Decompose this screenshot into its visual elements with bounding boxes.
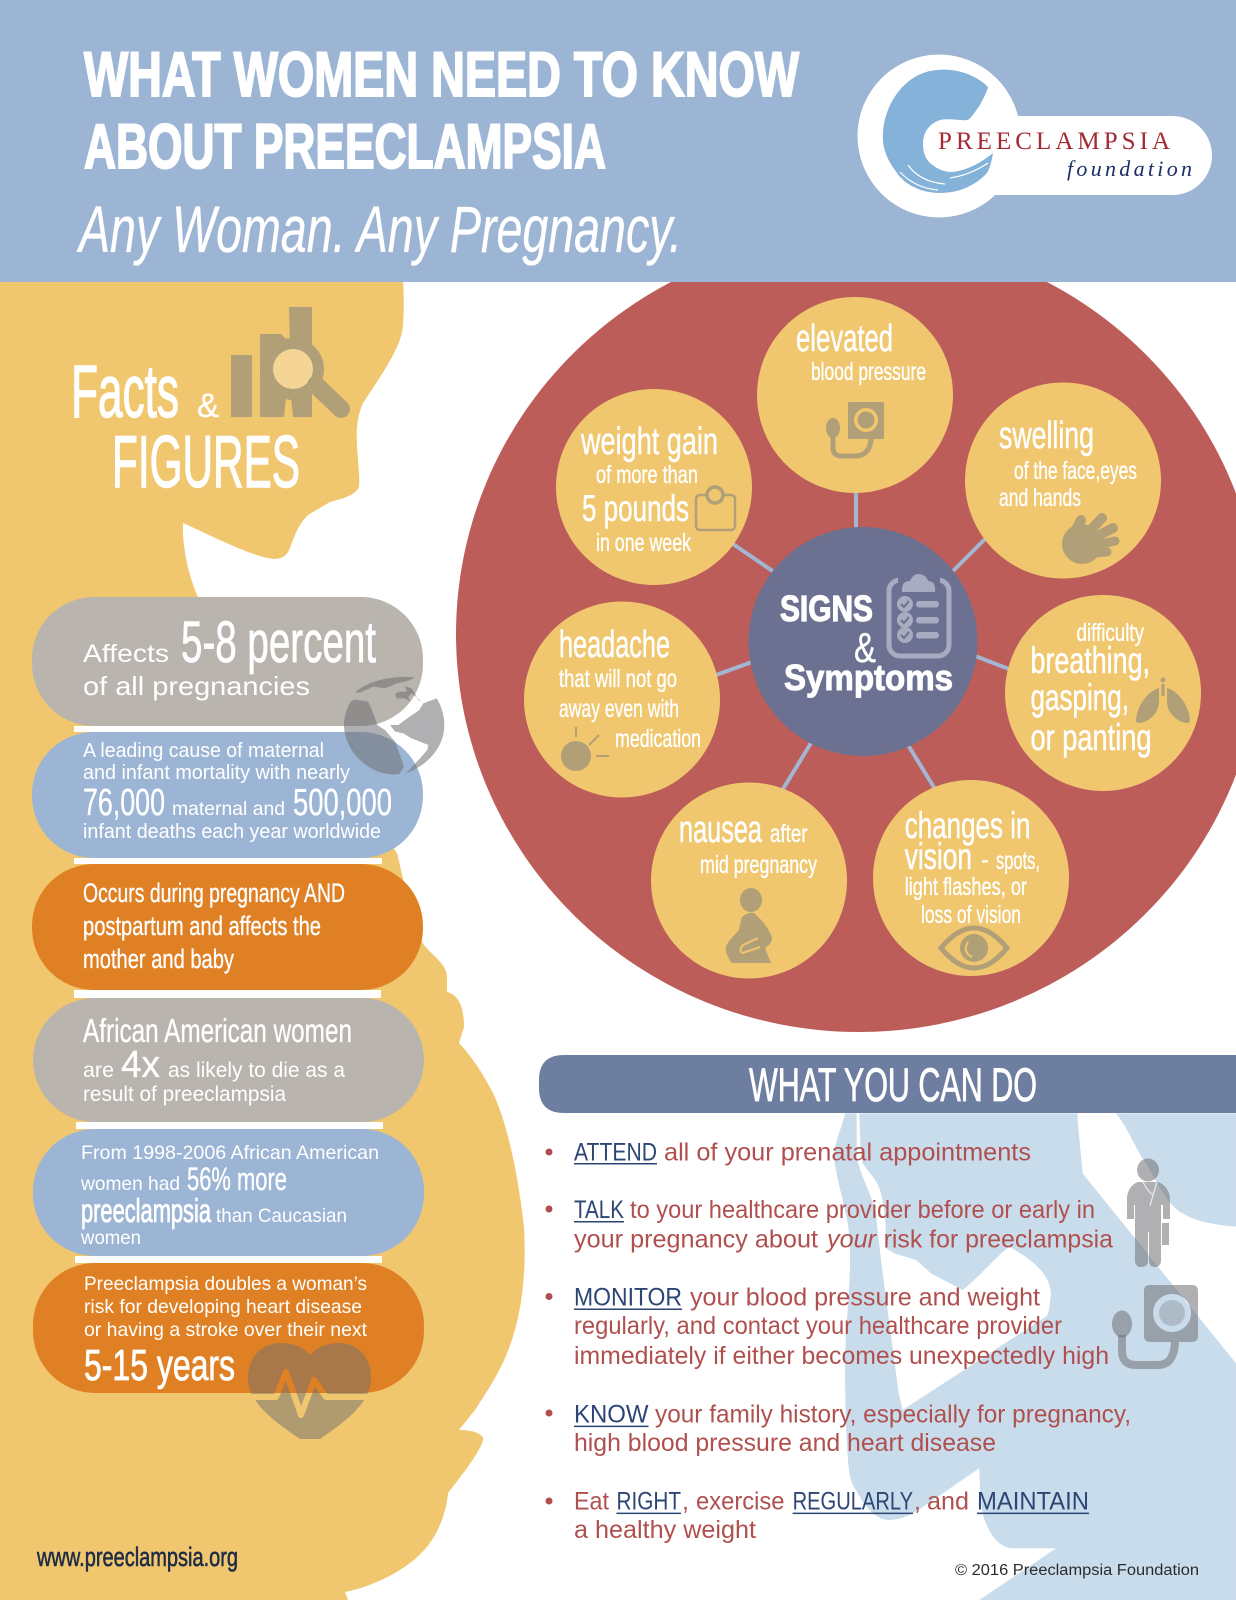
panel: affects 5-8 percent: 5-8 percent <box>181 610 376 675</box>
icon: bar chart with magnifier <box>231 307 341 417</box>
item: monitor blood pressure: MONITOR <box>574 1284 682 1312</box>
logo: Preeclampsia Foundation <box>858 54 1212 218</box>
item: eat right, exercise, maintain weight: exercise <box>696 1488 784 1516</box>
header band <box>0 0 1236 282</box>
panel: during pregnancy and postpartum: mother and baby <box>83 944 234 974</box>
item: know family history: high blood pressure and heart disease <box>574 1429 996 1457</box>
subtitle: Any Woman. Any Pregnancy. <box>76 192 682 266</box>
panel: leading cause of mortality: 76,000 <box>83 782 165 824</box>
logo: Preeclampsia Foundation: PREECLAMPSIA <box>938 128 1170 155</box>
symptom: swelling: and hands <box>999 484 1081 512</box>
copyright: © 2016 Preeclampsia Foundation <box>955 1562 1199 1579</box>
symptom: changes in vision: - <box>981 843 989 876</box>
website url: www.preeclampsia.org <box>36 1542 238 1572</box>
symptom: weight gain: weight gain <box>580 421 718 463</box>
panel: African American women 4x: result of preeclampsia <box>83 1083 286 1106</box>
panel: 56% more preeclampsia: women had <box>80 1173 180 1195</box>
panel: leading cause of mortality <box>32 732 423 858</box>
symptom: nausea <box>651 782 847 978</box>
panel: African American women 4x: are <box>83 1059 114 1082</box>
panel: African American women 4x: African American women <box>83 1012 352 1049</box>
heading: Facts and Figures: & <box>197 387 219 425</box>
symptom: nausea: mid pregnancy <box>700 851 817 879</box>
icon: doctor <box>1127 1158 1170 1267</box>
heading: Facts and Figures <box>71 350 300 503</box>
symptom: headache: headache <box>559 624 670 666</box>
item: eat right, exercise, maintain weight: and <box>927 1488 969 1516</box>
heading bar: what you can do: WHAT YOU CAN DO <box>749 1058 1037 1111</box>
yellow silhouette: pregnant woman <box>0 282 525 1600</box>
symptom: changes in vision <box>873 780 1069 976</box>
panel: during pregnancy and postpartum <box>32 864 423 990</box>
big red signs and symptoms circle <box>456 236 1236 1032</box>
title: ABOUT PREECLAMPSIA <box>84 112 606 182</box>
central hub: signs and symptoms: & <box>854 624 876 671</box>
symptom: headache: that will not go <box>559 665 677 693</box>
symptom: weight gain: of more than <box>596 461 698 489</box>
item: eat right, exercise, maintain weight: , <box>914 1488 921 1516</box>
title <box>84 40 799 182</box>
central hub: signs and symptoms: Symptoms <box>784 657 953 698</box>
panel: leading cause of mortality: A leading cause of maternal <box>83 740 324 762</box>
item: talk to your provider: your pregnancy about <box>574 1226 818 1254</box>
white connector strips between pills <box>74 726 383 1263</box>
light blue silhouette: mother and child <box>834 1113 1236 1600</box>
item: know family history <box>546 1401 1131 1457</box>
symptom: elevated blood pressure: blood pressure <box>811 358 926 386</box>
symptom: difficulty breathing: gasping, <box>1030 677 1129 718</box>
panel: heart disease risk: or having a stroke over their next <box>84 1319 368 1341</box>
symptom: elevated blood pressure <box>757 297 953 493</box>
item: know family history: your family history, especially for pregnancy, <box>655 1401 1131 1429</box>
action list: what you can do <box>546 1138 1131 1544</box>
panel: heart disease risk: 5-15 years <box>84 1341 235 1390</box>
symptom: difficulty breathing: breathing, <box>1030 640 1150 681</box>
title: WHAT WOMEN NEED TO KNOW <box>84 40 799 110</box>
panel: 56% more preeclampsia: From 1998-2006 African American <box>81 1142 379 1164</box>
panel: 56% more preeclampsia <box>33 1129 424 1256</box>
item: talk to your provider <box>546 1196 1113 1254</box>
icon: scale <box>696 487 735 530</box>
panel: heart disease risk: risk for developing heart disease <box>84 1296 362 1318</box>
symptom: swelling <box>965 382 1161 578</box>
panel: leading cause of mortality: 500,000 <box>293 782 392 824</box>
panel: African American women 4x <box>33 998 424 1122</box>
panel: African American women 4x: as likely to die as a <box>168 1059 345 1082</box>
panel: leading cause of mortality: and infant mortality with nearly <box>83 762 350 784</box>
item: talk to your provider: risk for preeclampsia <box>884 1226 1113 1254</box>
item: attend appointments: ATTEND <box>574 1138 657 1166</box>
icon: blood pressure monitor <box>1112 1285 1198 1365</box>
icon: clipboard checklist <box>889 574 949 656</box>
symptom: elevated blood pressure: elevated <box>796 318 893 360</box>
panel: leading cause of mortality: maternal and <box>172 799 285 820</box>
symptom: changes in vision: changes in <box>905 805 1030 846</box>
item: eat right, exercise, maintain weight: a healthy weight <box>574 1516 756 1544</box>
symptom: difficulty breathing: or panting <box>1030 717 1152 758</box>
item: monitor blood pressure: regularly, and contact your healthcare provider <box>574 1312 1062 1340</box>
symptom: difficulty breathing: difficulty <box>1076 619 1144 647</box>
panel: affects 5-8 percent: Affects <box>83 640 169 668</box>
symptom: weight gain: 5 pounds <box>582 488 689 529</box>
symptom: weight gain: in one week <box>596 529 691 557</box>
central hub: signs and symptoms: SIGNS <box>780 588 873 629</box>
symptom: headache: away even with <box>559 695 679 723</box>
icon: lungs <box>1136 678 1190 723</box>
item: eat right, exercise, maintain weight: RIGHT <box>616 1488 681 1516</box>
item: eat right, exercise, maintain weight: MAINTAIN <box>977 1488 1089 1516</box>
panel: heart disease risk <box>33 1263 424 1393</box>
item: monitor blood pressure <box>546 1284 1109 1370</box>
item: eat right, exercise, maintain weight: REGULARLY <box>793 1488 913 1516</box>
item: eat right, exercise, maintain weight: , <box>682 1488 689 1516</box>
panel: affects 5-8 percent: of all pregnancies <box>83 671 310 701</box>
heading bar: what you can do <box>539 1055 1236 1113</box>
icon: hand <box>1062 518 1115 564</box>
symptom: changes in vision: light flashes, or <box>905 873 1027 901</box>
icon: heart with pulse line <box>248 1343 371 1439</box>
item: eat right, exercise, maintain weight <box>546 1488 1089 1544</box>
icon: head pain burst <box>561 727 609 771</box>
icon: pregnant woman <box>726 888 772 963</box>
heading: Facts and Figures: FIGURES <box>112 422 300 503</box>
item: talk to your provider: to your healthcare provider before or early in <box>630 1196 1095 1224</box>
symptom: changes in vision: spots, <box>996 847 1040 875</box>
panel: heart disease risk: Preeclampsia doubles a woman’s <box>84 1273 367 1295</box>
panel: affects 5-8 percent <box>32 597 423 726</box>
item: monitor blood pressure: your blood pressure and weight <box>690 1284 1040 1312</box>
panel: 56% more preeclampsia: than Caucasian <box>216 1205 347 1227</box>
item: eat right, exercise, maintain weight: Eat <box>574 1488 609 1516</box>
symptom: changes in vision: vision <box>905 836 972 877</box>
panel: during pregnancy and postpartum: Occurs during pregnancy AND <box>83 878 345 908</box>
icon: blood pressure cuff <box>826 402 884 456</box>
connector lines: hub to symptoms <box>716 490 1009 789</box>
icon: eye <box>941 928 1007 968</box>
item: monitor blood pressure: immediately if either becomes unexpectedly high <box>574 1342 1109 1370</box>
panel: leading cause of mortality: infant deaths each year worldwide <box>83 821 381 843</box>
panel: 56% more preeclampsia: preeclampsia <box>81 1192 211 1229</box>
item: know family history: KNOW <box>574 1401 649 1429</box>
symptom: swelling: of the face,eyes <box>1014 457 1137 485</box>
symptom: nausea: nausea <box>679 809 763 851</box>
heading: Facts and Figures: Facts <box>71 350 179 433</box>
symptom: headache: medication <box>615 725 701 753</box>
panel: 56% more preeclampsia: women <box>80 1227 141 1249</box>
panel: during pregnancy and postpartum: postpartum and affects the <box>83 911 321 941</box>
symptom: swelling: swelling <box>999 415 1094 457</box>
item: attend appointments: all of your prenatal appointments <box>664 1138 1031 1166</box>
item: talk to your provider: TALK <box>574 1196 624 1224</box>
item: talk to your provider: your <box>825 1226 878 1254</box>
symptom: headache <box>524 602 720 798</box>
panel: 56% more preeclampsia: 56% more <box>187 1161 287 1197</box>
symptom: weight gain <box>556 389 752 585</box>
symptom: difficulty breathing <box>1005 595 1201 791</box>
symptom: nausea: after <box>770 820 808 848</box>
logo: Preeclampsia Foundation: foundation <box>1067 156 1192 181</box>
icon: globe <box>344 677 444 774</box>
panel: African American women 4x: 4x <box>121 1044 160 1086</box>
central hub: signs and symptoms <box>748 527 978 756</box>
symptom: changes in vision: loss of vision <box>921 901 1021 929</box>
